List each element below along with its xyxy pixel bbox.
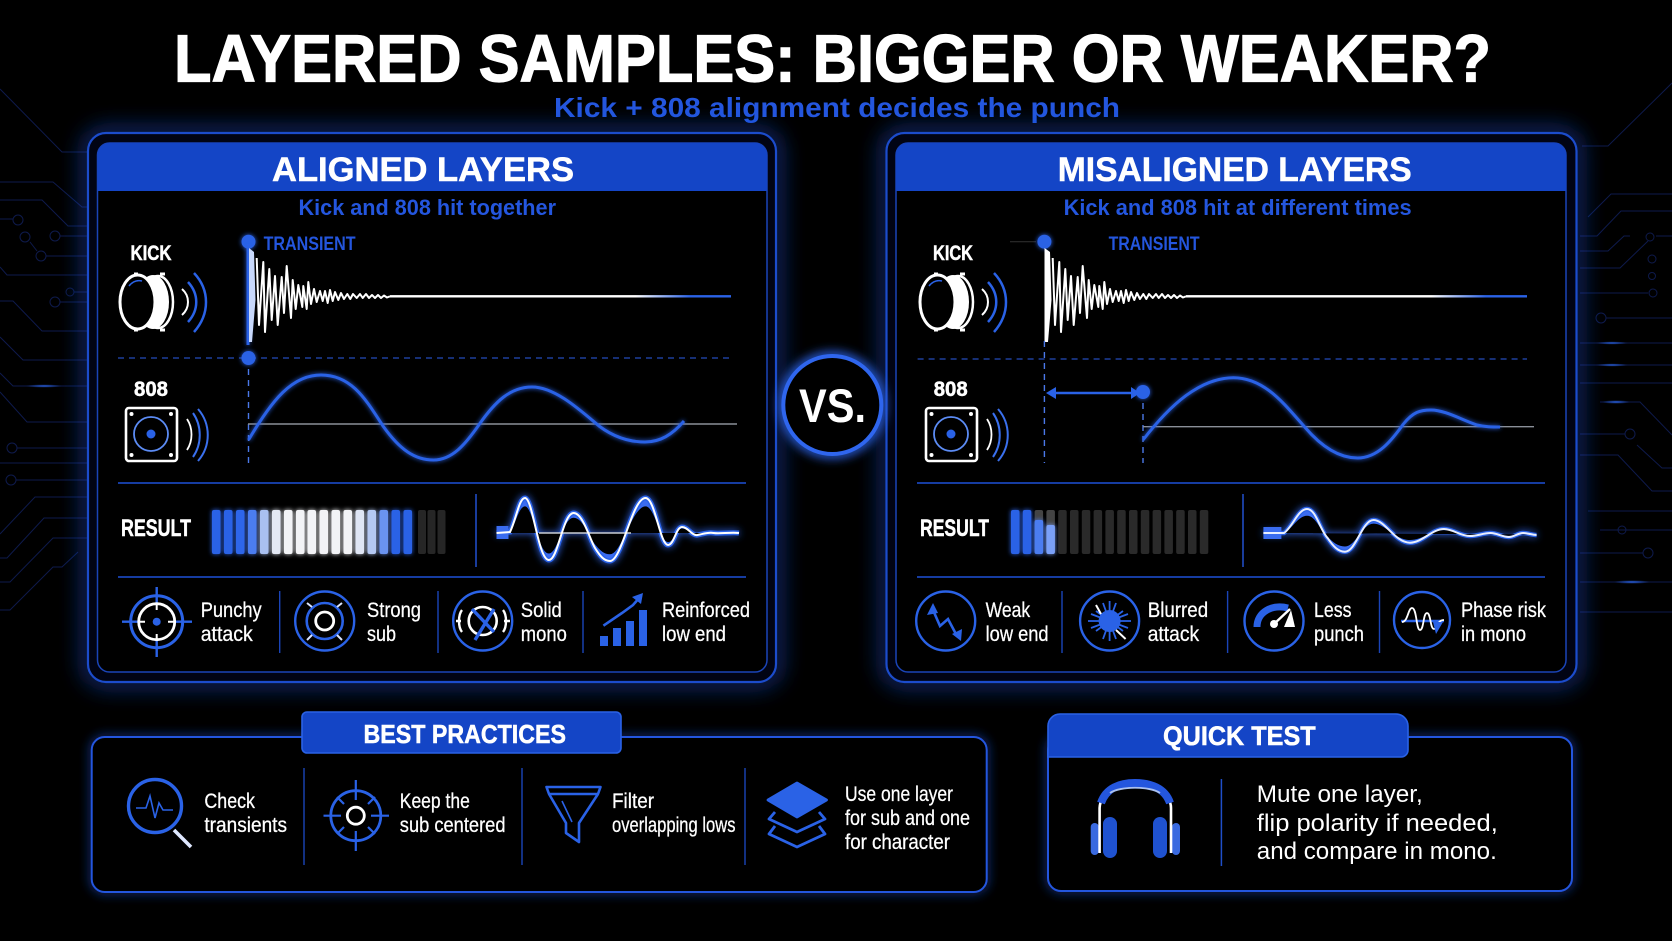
text: solid mono <box>521 599 567 646</box>
text: blurred attack: Blurred <box>1148 599 1208 622</box>
icon: filter funnel <box>546 787 600 842</box>
icon: less punch <box>1244 592 1304 650</box>
result waveform <box>496 498 739 561</box>
offset guide <box>918 341 1527 463</box>
text: solid mono: mono <box>521 623 567 646</box>
text: less punch: Less <box>1314 599 1352 622</box>
icon: phase risk <box>1394 592 1450 648</box>
transient marker <box>1010 234 1200 255</box>
result meter <box>1011 510 1208 554</box>
icon: kick drum <box>120 273 206 332</box>
text: check transients <box>204 790 287 837</box>
text: quick test steps: and compare in mono. <box>1257 838 1497 865</box>
icon: headphones <box>1091 783 1180 858</box>
result label: RESULT <box>920 515 989 542</box>
subtitle: Kick + 808 alignment decides the punch <box>554 92 1120 123</box>
header: aligned layers: ALIGNED LAYERS <box>272 151 574 189</box>
text: keep sub centered: Keep the <box>400 790 470 813</box>
text: strong sub: sub <box>367 623 396 646</box>
icon: punchy attack <box>122 587 192 657</box>
text: filter overlapping lows <box>612 790 736 837</box>
text: check transients: Check <box>204 790 255 813</box>
transient marker: TRANSIENT <box>264 234 356 255</box>
text: strong sub <box>367 599 421 646</box>
text: quick test steps: flip polarity if needed, <box>1257 810 1498 837</box>
icon: keep sub centered <box>324 780 389 851</box>
subheading: Kick and 808 hit together <box>298 195 556 220</box>
text: use one layer: for character <box>845 831 950 854</box>
vs badge: VS. <box>799 379 866 432</box>
text: phase risk in mono: in mono <box>1461 623 1526 646</box>
text: use one layer: Use one layer <box>845 783 953 806</box>
icon: solid mono <box>453 592 512 650</box>
text: solid mono: Solid <box>521 599 562 622</box>
tab: best practices <box>302 712 621 753</box>
icon: blurred attack <box>1080 592 1139 650</box>
text: blurred attack: attack <box>1148 623 1200 646</box>
text: punchy attack: Punchy <box>201 599 262 622</box>
tab: best practices: BEST PRACTICES <box>364 719 566 749</box>
808 label: 808 <box>134 378 168 401</box>
panel: misaligned layers <box>886 133 1576 682</box>
text: punchy attack <box>201 599 262 646</box>
icon: 808 speaker <box>926 408 1008 461</box>
text: use one layer <box>845 783 970 854</box>
icon: kick drum <box>920 273 1006 332</box>
808 waveform <box>1143 378 1534 458</box>
vs badge <box>783 356 881 454</box>
icon: reinforced low end <box>600 593 647 646</box>
808 waveform <box>248 375 737 460</box>
header: aligned layers <box>98 143 767 191</box>
kick label: KICK <box>130 242 172 265</box>
text: phase risk in mono <box>1461 599 1546 646</box>
text: reinforced low end: Reinforced <box>662 599 750 622</box>
text: keep sub centered <box>400 790 506 837</box>
circuit traces: right <box>1580 83 1672 612</box>
subheading: Kick and 808 hit at different times <box>1064 195 1412 220</box>
text: reinforced low end <box>662 599 750 646</box>
text: less punch <box>1314 599 1364 646</box>
text: weak low end: low end <box>986 623 1049 646</box>
result label: RESULT <box>121 515 191 542</box>
result meter <box>212 510 412 554</box>
text: strong sub: Strong <box>367 599 421 622</box>
header: misaligned layers <box>896 143 1566 191</box>
kick label: KICK <box>933 242 973 265</box>
icon: weak low end <box>916 592 975 650</box>
text: reinforced low end: low end <box>662 623 726 646</box>
header: misaligned layers: MISALIGNED LAYERS <box>1058 151 1412 189</box>
transient marker: TRANSIENT <box>1109 234 1200 255</box>
text: quick test steps <box>1257 781 1498 865</box>
icon: check transients <box>128 780 191 847</box>
808 label: 808 <box>934 378 968 401</box>
panel: quick test <box>1048 714 1572 891</box>
kick waveform <box>248 246 731 345</box>
text: phase risk in mono: Phase risk <box>1461 599 1546 622</box>
text: blurred attack <box>1148 599 1208 646</box>
text: weak low end: Weak <box>986 599 1031 622</box>
kick waveform <box>1044 248 1527 342</box>
text: less punch: punch <box>1314 623 1364 646</box>
text: check transients: transients <box>204 814 287 837</box>
text: quick test steps: Mute one layer, <box>1257 781 1423 808</box>
icon: strong sub <box>295 592 354 650</box>
panel: best practices <box>92 712 987 892</box>
icon: layers <box>768 783 826 847</box>
tab: quick test: QUICK TEST <box>1163 721 1316 751</box>
text: use one layer: for sub and one <box>845 807 970 830</box>
title: LAYERED SAMPLES: BIGGER OR WEAKER? <box>174 22 1491 96</box>
circuit traces: left <box>0 89 90 610</box>
text: keep sub centered: sub centered <box>400 814 506 837</box>
panel: aligned layers <box>88 133 776 682</box>
icon: 808 speaker <box>126 408 208 461</box>
text: filter overlapping lows: Filter <box>612 790 654 813</box>
text: filter overlapping lows: overlapping lows <box>612 814 736 837</box>
result waveform <box>1263 509 1537 552</box>
text: weak low end <box>986 599 1049 646</box>
text: punchy attack: attack <box>201 623 253 646</box>
tab: quick test <box>1048 714 1408 757</box>
alignment guide <box>118 351 731 463</box>
unlit meter bars <box>418 510 446 554</box>
